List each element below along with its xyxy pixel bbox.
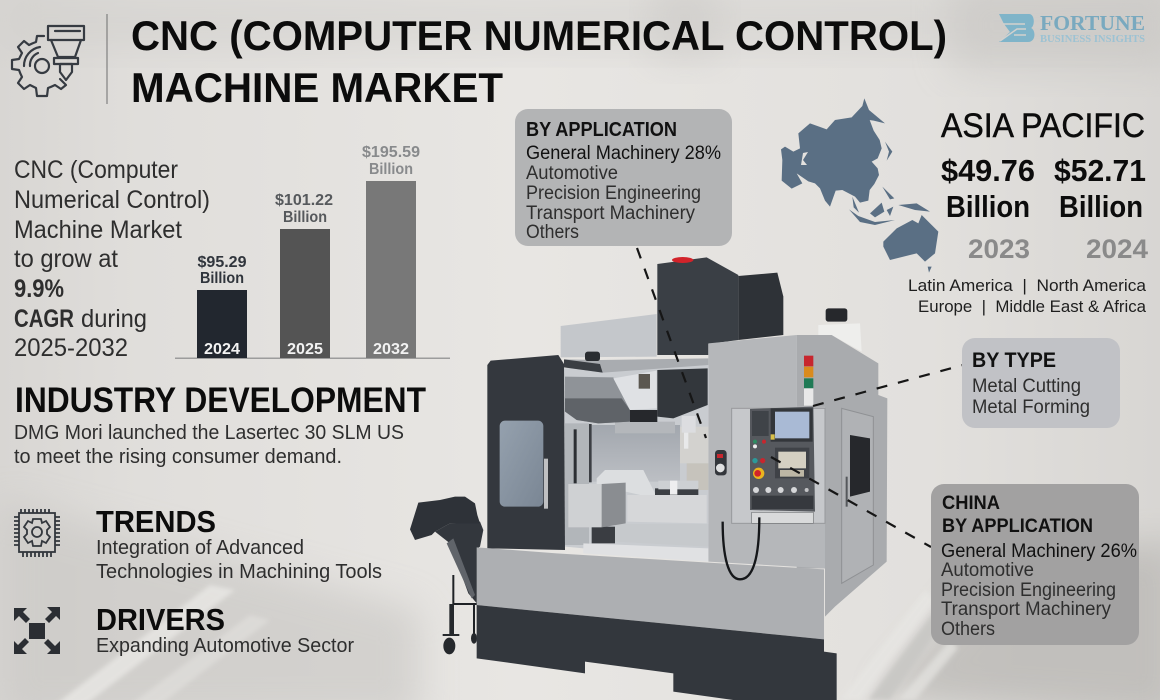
- market growth text: CAGR: [14, 305, 74, 333]
- title: CNC (COMPUTER NUMERICAL CONTROL): [131, 12, 947, 59]
- market growth text: 9.9%: [14, 275, 64, 303]
- spindle tower: [657, 257, 783, 355]
- drivers: DRIVERS: [96, 602, 225, 637]
- divider: [106, 14, 108, 104]
- callout: China by application: [931, 484, 1139, 645]
- callout: China by application: General Machinery 26%: [941, 541, 1137, 562]
- machine plinth: [477, 605, 837, 700]
- machine base: [477, 547, 824, 639]
- bar 2024: [197, 254, 247, 358]
- title: MACHINE MARKET: [131, 64, 503, 111]
- market growth text: Numerical Control): [14, 186, 210, 214]
- title: [131, 12, 947, 111]
- bar chart: [175, 144, 450, 359]
- control panel: [732, 407, 825, 523]
- 2024 value: [1054, 153, 1148, 264]
- logo: Fortune Business Insights: FORTUNE: [1040, 11, 1145, 35]
- icon: gear with CNC spindle: [12, 26, 84, 96]
- 2023 value: Billion: [946, 189, 1030, 224]
- trends: Technologies in Machining Tools: [96, 561, 382, 583]
- icon: expanding arrows: [14, 607, 60, 654]
- callout: by application: Transport Machinery: [526, 203, 695, 224]
- CNC machine illustration: [410, 257, 887, 700]
- Asia Pacific figures: ASIA PACIFIC: [941, 107, 1145, 145]
- 2024 value: Billion: [1059, 189, 1143, 224]
- other regions: Europe | Middle East & Africa: [918, 297, 1147, 316]
- callout: by application: Automotive: [526, 163, 618, 184]
- other regions: [908, 276, 1147, 316]
- stack light: [804, 356, 813, 406]
- bar 2025: 2025: [287, 341, 323, 358]
- market growth text: during: [81, 305, 147, 333]
- side door: [842, 408, 873, 583]
- market growth text: [14, 156, 210, 362]
- callout: by type: Metal Cutting: [972, 376, 1081, 397]
- callout: China by application: Automotive: [941, 560, 1034, 581]
- bar 2025: Billion: [283, 209, 327, 226]
- 2023 value: 2023: [968, 234, 1030, 264]
- bar 2032: $195.59: [362, 144, 420, 161]
- callout: by type: BY TYPE: [972, 349, 1056, 372]
- trends: Integration of Advanced: [96, 537, 304, 559]
- back panel: [561, 314, 657, 357]
- callout: China by application: Transport Machinery: [941, 599, 1111, 620]
- market growth text: to grow at: [14, 245, 118, 273]
- callout: by application: Others: [526, 222, 579, 243]
- 2024 value: 2024: [1086, 234, 1148, 264]
- callout: by type: Metal Forming: [972, 397, 1090, 418]
- bar 2032: Billion: [369, 161, 413, 178]
- logo: Fortune Business Insights: BUSINESS INSIGHTS: [1040, 34, 1145, 45]
- market growth text: 2025-2032: [14, 334, 128, 362]
- bar 2024: Billion: [200, 270, 244, 287]
- machining interior: [557, 358, 708, 565]
- handwheel pendant: [715, 450, 727, 475]
- logo mark: [999, 14, 1034, 42]
- other regions: Latin America | North America: [908, 276, 1147, 295]
- callout: by application: General Machinery 28%: [526, 143, 721, 164]
- trends: TRENDS: [96, 504, 216, 539]
- coolant unit: [818, 308, 862, 352]
- logo: Fortune Business Insights: [999, 11, 1145, 45]
- bar 2032: 2032: [373, 341, 409, 358]
- 2024 value: $52.71: [1054, 153, 1146, 188]
- callout: China by application: Precision Engineering: [941, 580, 1116, 601]
- callout: by application: Precision Engineering: [526, 183, 701, 204]
- industry development: to meet the rising consumer demand.: [14, 446, 342, 468]
- industry development: DMG Mori launched the Lasertec 30 SLM US: [14, 422, 404, 444]
- bar 2024: 2024: [204, 341, 240, 358]
- Asia Pacific figures: [908, 107, 1148, 316]
- market growth text: CNC (Computer: [14, 156, 178, 184]
- machine front cabinet: [708, 335, 825, 568]
- 2023 value: [941, 153, 1035, 264]
- world map: Asia Pacific: [781, 98, 938, 273]
- callout: by application: BY APPLICATION: [526, 119, 677, 141]
- callout: China by application: Others: [941, 619, 995, 640]
- callout: China by application: BY APPLICATION: [942, 516, 1093, 537]
- dashed connectors: [637, 248, 963, 547]
- drivers: Expanding Automotive Sector: [96, 635, 354, 657]
- callout: by type: [962, 338, 1120, 428]
- bar 2025: [275, 192, 333, 358]
- callout: by application: [515, 109, 732, 246]
- pendant cable: [723, 517, 759, 579]
- callout: China by application: CHINA: [942, 493, 1000, 514]
- enclosure door: [487, 352, 600, 550]
- icon: chip with gear: [14, 509, 60, 557]
- industry development: INDUSTRY DEVELOPMENT: [15, 381, 426, 420]
- chip conveyor: [410, 497, 483, 654]
- industry development: [14, 381, 426, 468]
- bar 2025: $101.22: [275, 192, 333, 209]
- bar 2032: [362, 144, 420, 358]
- trends: [96, 504, 382, 583]
- market growth text: Machine Market: [14, 216, 182, 244]
- 2023 value: $49.76: [941, 153, 1035, 188]
- Caspian sea cut-out: [801, 152, 808, 165]
- bar 2024: $95.29: [198, 254, 247, 271]
- machine side panel: [797, 335, 887, 617]
- drivers: [96, 602, 354, 657]
